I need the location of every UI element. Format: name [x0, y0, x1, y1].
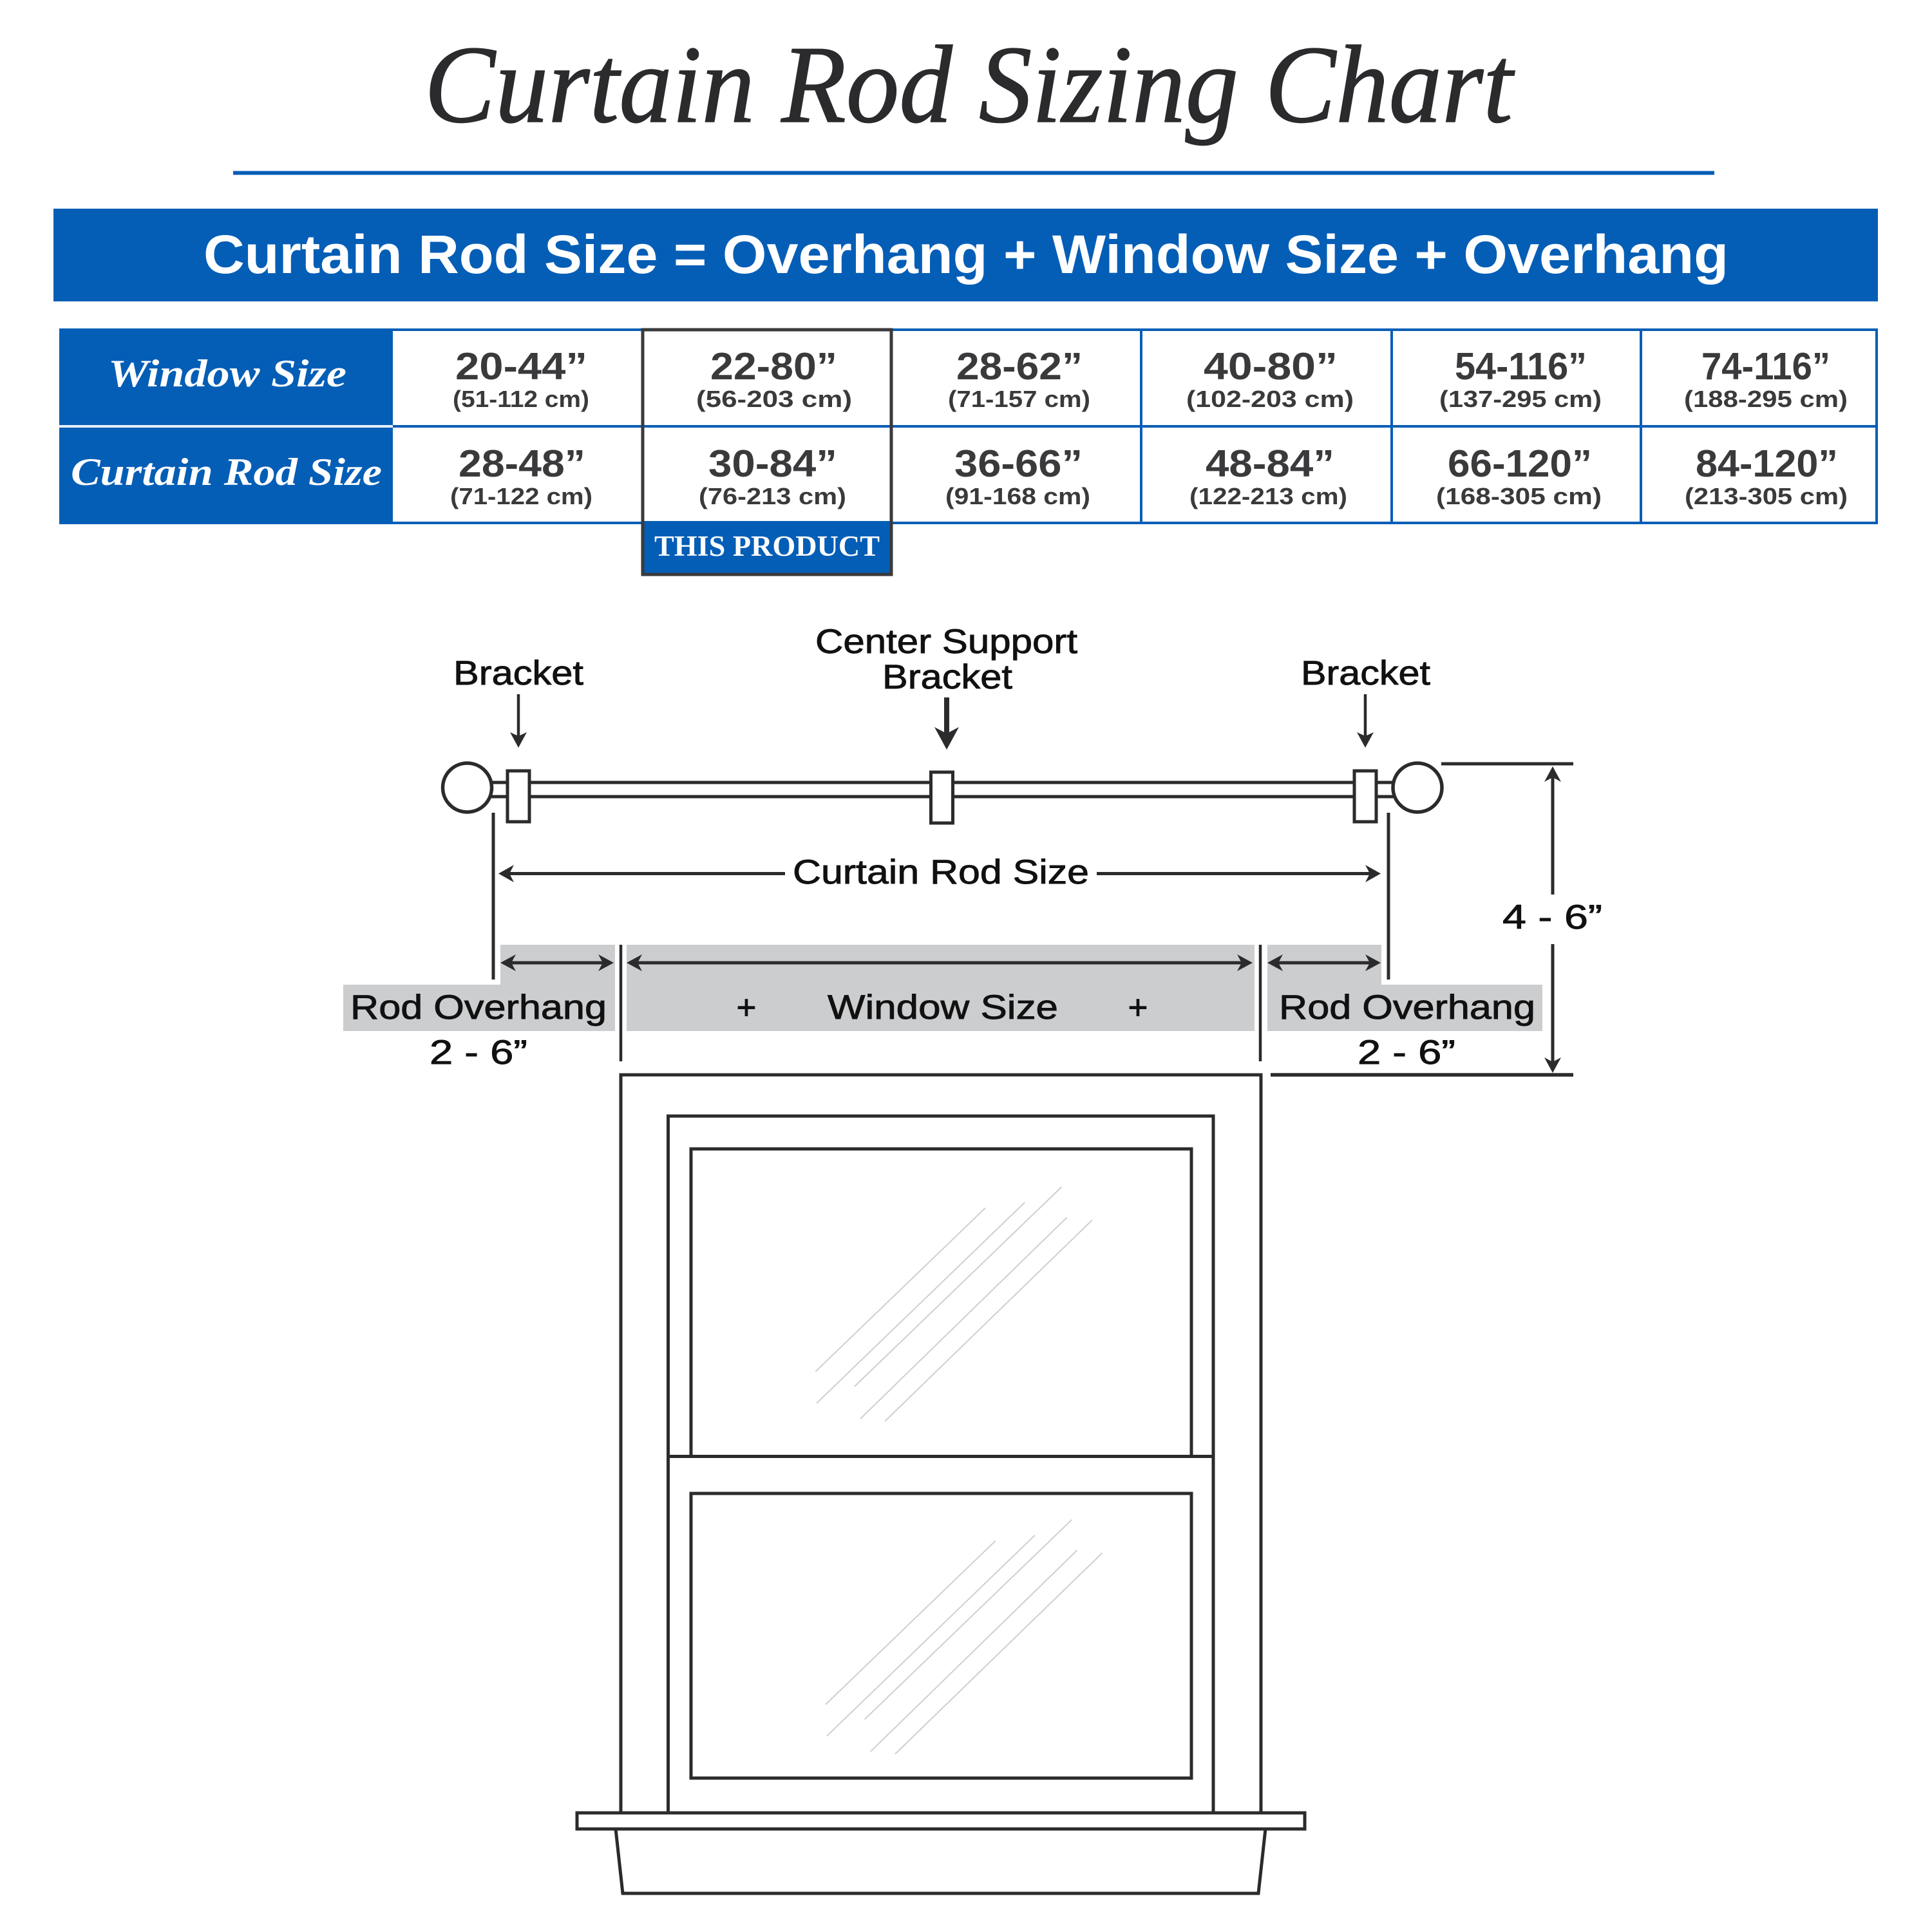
sizing table: [59, 328, 1878, 574]
column: 20-44: (51-112 cm): [453, 386, 589, 412]
column: 74-116: (213-305 cm): [1685, 483, 1848, 509]
column: 28-62: (71-157 cm): [948, 386, 1090, 412]
column: 40-80: 48-84”: [1206, 442, 1334, 485]
rod end extension lines: [493, 813, 1388, 980]
label: plus left: +: [737, 989, 756, 1027]
column: 22-80: 30-84”: [708, 442, 837, 485]
label: right bracket: Bracket: [1301, 654, 1430, 692]
label: left overhang size: 2 - 6”: [430, 1034, 527, 1072]
window sill: [577, 1813, 1305, 1829]
column: 28-62: (91-168 cm): [945, 483, 1090, 509]
height dimension: 4 - 6”: [1502, 898, 1602, 936]
column: 22-80: (76-213 cm): [699, 483, 846, 509]
column: 74-116: 84-120”: [1696, 442, 1838, 485]
header cell: curtain rod size: Curtain Rod Size: [71, 451, 382, 493]
header cell: window size: Window Size: [108, 352, 346, 395]
column: 20-44: 28-48”: [459, 442, 585, 485]
curtain rod: [443, 763, 1442, 823]
height dimension: [1271, 764, 1602, 1075]
rod tube: [491, 782, 1395, 797]
column: 28-62: 28-62”: [956, 345, 1083, 388]
label: center support bracket: [815, 623, 1077, 696]
column: 22-80: (56-203 cm): [696, 386, 852, 412]
table grid: [59, 330, 1878, 523]
label: left bracket: Bracket: [453, 654, 583, 692]
left bracket: [507, 771, 529, 822]
formula banner: [53, 209, 1878, 301]
column: 40-80: [1186, 345, 1354, 509]
title rule: [233, 171, 1714, 175]
column: 40-80: (102-203 cm): [1186, 386, 1354, 412]
column: 74-116: 74-116”: [1701, 345, 1830, 388]
this product highlight: [643, 330, 891, 574]
upper glass reflections: [815, 1187, 1092, 1421]
column: 40-80: 40-80”: [1204, 345, 1338, 388]
label: right rod overhang: Rod Overhang: [1279, 989, 1535, 1027]
column: 54-116: 54-116”: [1455, 345, 1587, 388]
column: 74-116: [1684, 345, 1848, 509]
this product highlight: THIS PRODUCT: [654, 530, 880, 562]
column: 22-80: 22-80”: [710, 345, 837, 388]
header cell: window size: [59, 328, 393, 425]
label: window size: Window Size: [828, 989, 1058, 1027]
label: center support bracket: Center Support: [815, 623, 1077, 661]
left finial: [443, 763, 492, 812]
column: 20-44: (71-122 cm): [450, 483, 592, 509]
arrow: left bracket: [510, 694, 527, 748]
gray bands behind measurements: [343, 945, 1542, 1031]
column: 22-80: [696, 345, 852, 509]
center support bracket: [931, 772, 953, 823]
label: center support bracket: Bracket: [882, 658, 1012, 696]
title: Curtain Rod Sizing Chart: [424, 24, 1515, 146]
column: 54-116: 66-120”: [1448, 442, 1592, 485]
left overhang arrow: [500, 954, 614, 971]
window size arrow: [627, 954, 1253, 971]
column: 20-44: [450, 345, 592, 509]
meeting rail: [668, 1455, 1214, 1458]
label: left rod overhang: Rod Overhang: [350, 989, 607, 1027]
column: 28-62: 36-66”: [954, 442, 1083, 485]
inner sash: [668, 1116, 1213, 1813]
column: 20-44: 20-44”: [455, 345, 587, 388]
column: 54-116: (137-295 cm): [1439, 386, 1602, 412]
lower glass pane: [691, 1493, 1191, 1778]
label: plus right: +: [1128, 989, 1148, 1027]
curtain rod size dimension: Curtain Rod Size: [793, 853, 1089, 891]
column: 54-116: (168-305 cm): [1436, 483, 1602, 509]
column: 40-80: (122-213 cm): [1189, 483, 1347, 509]
upper glass pane: [691, 1149, 1191, 1456]
arrow: center support bracket: [934, 697, 959, 750]
right overhang arrow: [1267, 954, 1381, 971]
right bracket: [1354, 771, 1376, 822]
outer frame: [621, 1075, 1261, 1813]
apron: [616, 1829, 1265, 1893]
right finial: [1393, 763, 1442, 812]
column: 28-62: [945, 345, 1090, 509]
header cell: curtain rod size: [59, 428, 393, 524]
window illustration: [577, 1075, 1305, 1893]
formula banner: Curtain Rod Size = Overhang + Window Size + Overhang: [204, 224, 1728, 285]
column: 74-116: (188-295 cm): [1684, 386, 1848, 412]
curtain rod size dimension: [498, 853, 1381, 891]
window edge extension lines: [621, 945, 1260, 1061]
arrow: right bracket: [1357, 694, 1374, 748]
label: right overhang size: 2 - 6”: [1358, 1034, 1455, 1072]
lower glass reflections: [826, 1520, 1103, 1754]
header row gap: [59, 425, 393, 428]
column: 54-116: [1436, 345, 1602, 509]
